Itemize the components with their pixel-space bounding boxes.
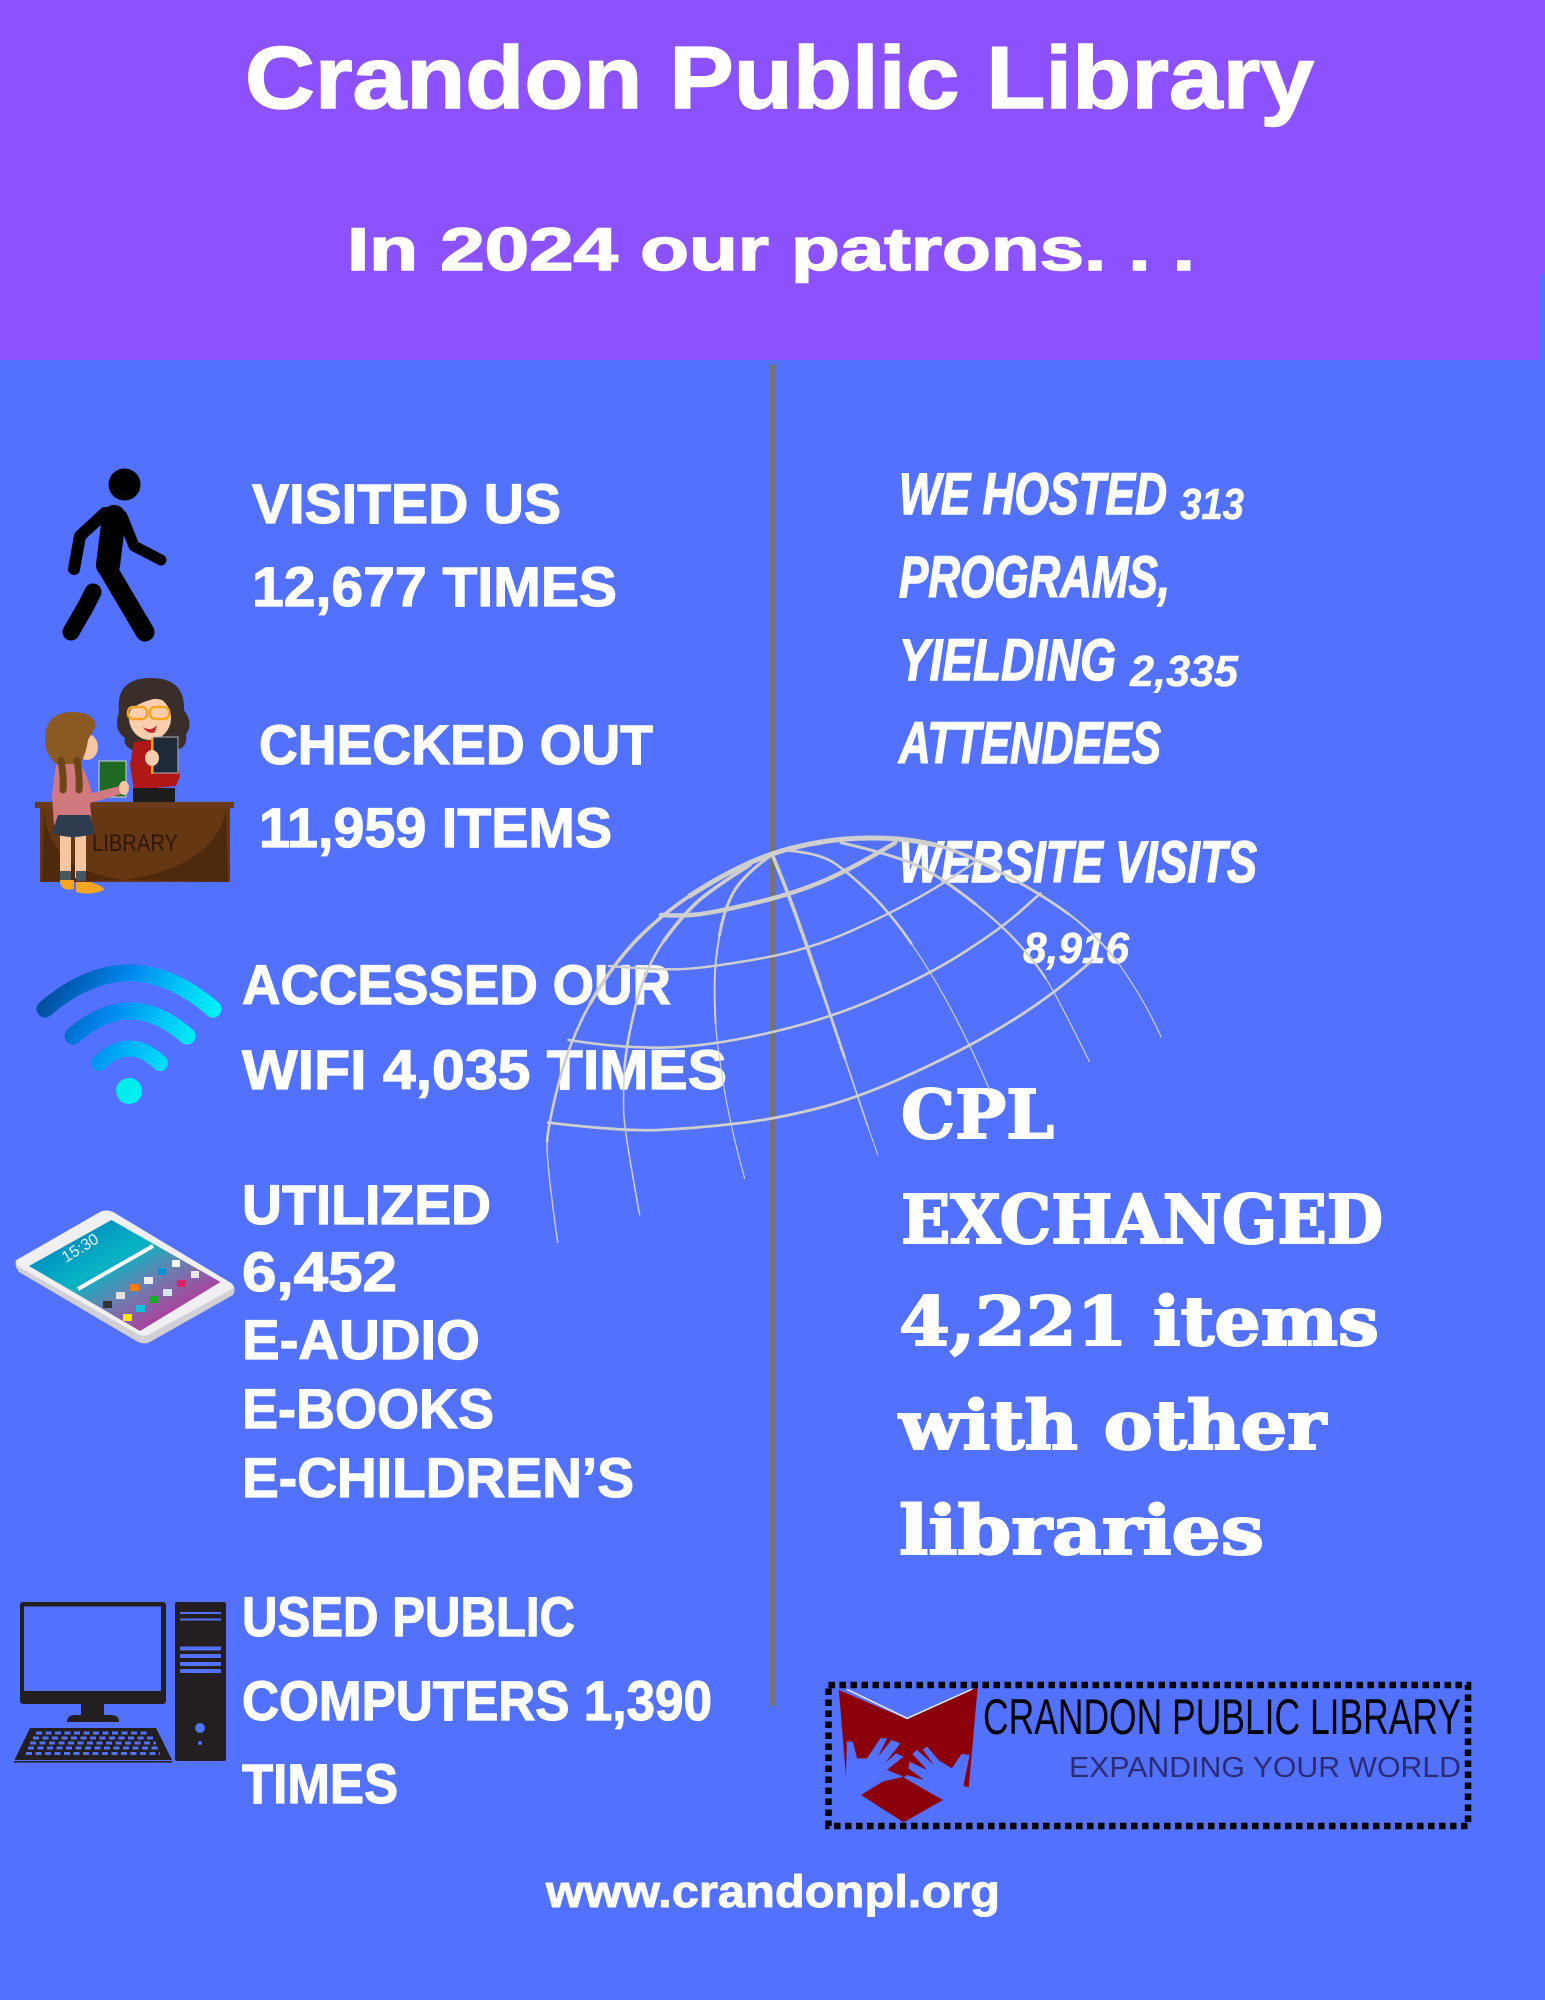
icon: open book with hands <box>839 1687 978 1822</box>
stat: e-resources <box>15 1173 634 1509</box>
text: 12,677 TIMES <box>252 555 617 618</box>
text: website visits: 8,916 <box>1023 924 1130 973</box>
icon: tablet: 15:30 <box>59 1231 102 1266</box>
icon: librarian and child at desk <box>35 678 234 894</box>
text: 11,959 ITEMS <box>259 796 612 859</box>
text: CHECKED OUT <box>259 713 653 776</box>
title: Crandon Public Library <box>245 28 1314 127</box>
text: E-CHILDREN’S <box>242 1446 634 1509</box>
text <box>242 1585 712 1815</box>
icon: desktop computer <box>14 1602 226 1762</box>
text: E-BOOKS <box>242 1377 494 1440</box>
text <box>242 953 727 1101</box>
text: interlibrary exchange: EXCHANGED <box>901 1180 1383 1259</box>
stat: computers <box>14 1585 712 1815</box>
text: UTILIZED <box>242 1173 491 1236</box>
stat: visits <box>71 468 617 632</box>
text: interlibrary exchange: libraries <box>899 1491 1264 1570</box>
text: programs <box>897 462 1244 776</box>
text: programs: WE HOSTED <box>899 462 1167 527</box>
icon: walking person <box>71 468 161 632</box>
text: WIFI 4,035 TIMES <box>242 1038 727 1101</box>
website url: www.crandonpl.org <box>545 1866 1000 1917</box>
icon: librarian and child at desk: LIBRARY <box>92 830 178 857</box>
center divider <box>770 365 776 1706</box>
text: VISITED US <box>252 472 561 535</box>
text: interlibrary exchange: 4,221 items <box>899 1282 1379 1361</box>
globe wireframe <box>547 838 1161 1243</box>
text: E-AUDIO <box>242 1308 480 1371</box>
text: ACCESSED OUR <box>242 953 671 1016</box>
icon: tablet <box>15 1210 235 1344</box>
logo tagline: EXPANDING YOUR WORLD <box>1069 1752 1461 1784</box>
text: 6,452 <box>242 1240 397 1303</box>
text: TIMES <box>242 1752 398 1815</box>
text: interlibrary exchange <box>898 1075 1383 1570</box>
subtitle: In 2024 our patrons. . . <box>347 216 1195 283</box>
text: interlibrary exchange: with other <box>898 1386 1327 1465</box>
stat: checked out <box>35 678 653 894</box>
text: programs: 2,335 <box>1129 647 1239 696</box>
text <box>259 713 653 859</box>
text: website visits <box>899 830 1257 973</box>
text <box>252 472 617 618</box>
text: programs: ATTENDEES <box>897 711 1161 776</box>
child <box>60 833 71 878</box>
text: programs: 313 <box>1180 480 1244 529</box>
text: COMPUTERS 1,390 <box>242 1669 712 1732</box>
logo: Crandon Public Library <box>828 1685 1468 1826</box>
icon: wifi <box>45 973 213 1104</box>
text: programs: PROGRAMS, <box>899 545 1170 610</box>
text: interlibrary exchange: CPL <box>901 1075 1054 1154</box>
desk <box>40 807 230 882</box>
header banner <box>0 0 1545 360</box>
text <box>242 1173 634 1509</box>
stat: wifi <box>45 953 727 1104</box>
text: programs: YIELDING <box>899 628 1116 693</box>
text: website visits: WEBSITE VISITS <box>899 830 1257 895</box>
text: USED PUBLIC <box>242 1585 575 1648</box>
